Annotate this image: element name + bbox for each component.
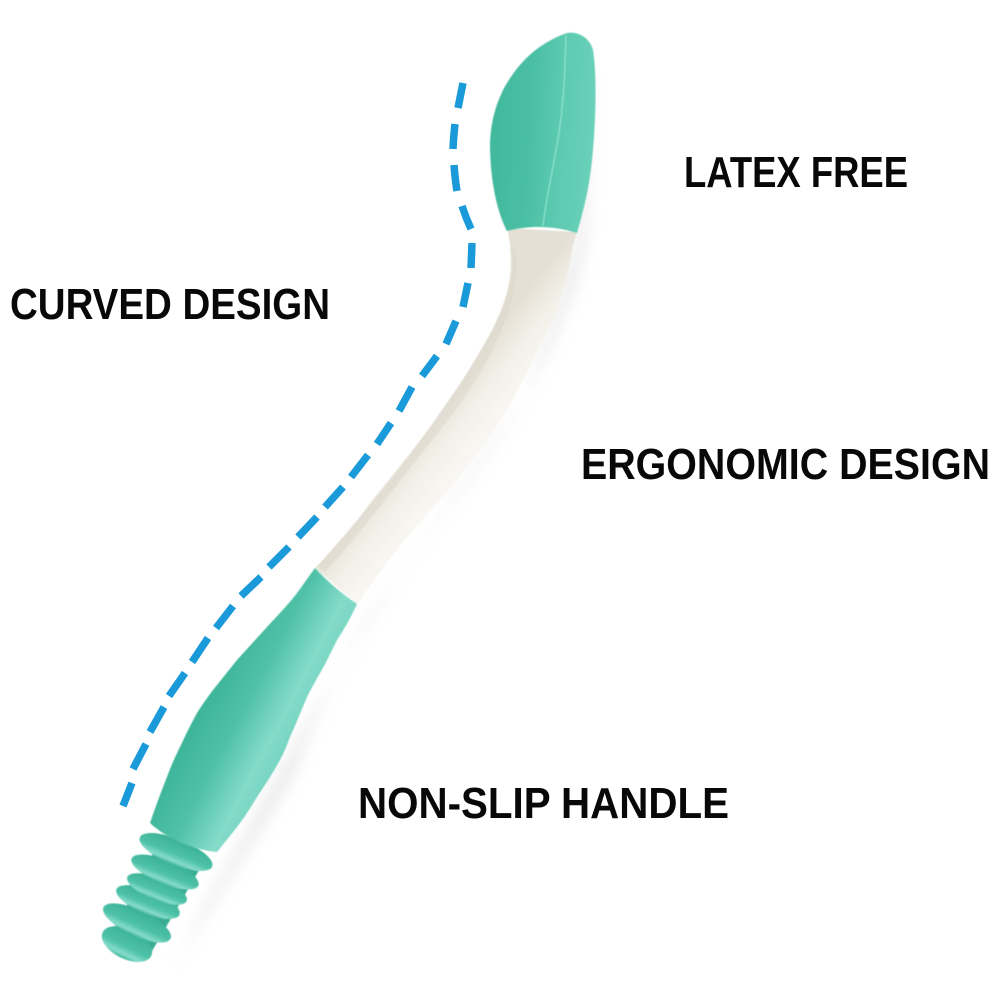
label: curved design: CURVED DESIGN [10,281,330,329]
white curved shaft [315,228,577,604]
green non-slip grip [150,568,357,852]
product: long reach aid [96,33,596,969]
drop shadow [175,64,590,964]
dashed curve arrow line [123,83,472,806]
label: latex free: LATEX FREE [684,149,908,197]
ribbed end [96,825,217,969]
green head [490,33,596,233]
label: non-slip handle: NON-SLIP HANDLE [358,780,729,828]
